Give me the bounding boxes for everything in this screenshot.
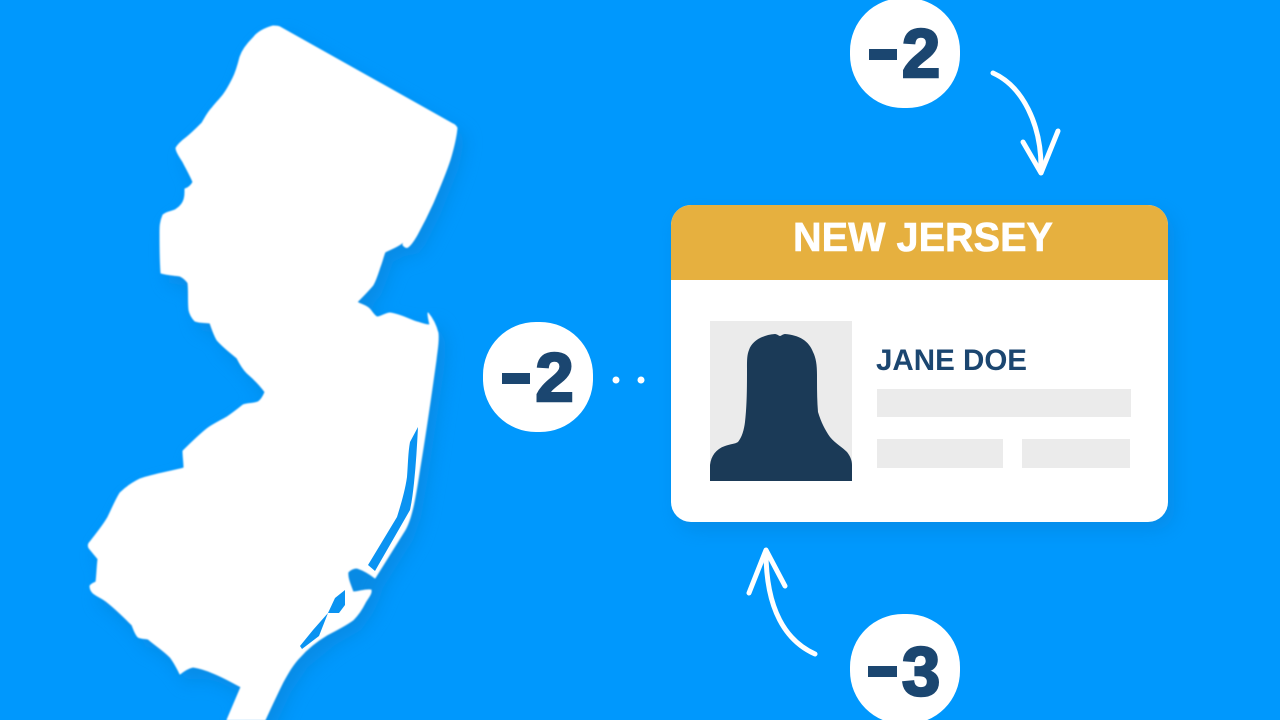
card heading: NEW JERSEY (793, 214, 1053, 260)
map: coastal lagoon upper (368, 427, 418, 571)
id card (671, 205, 1174, 530)
cardholder name: JANE DOE (876, 344, 1027, 377)
photo silhouette (710, 334, 852, 481)
placeholder line full (877, 389, 1131, 417)
badge: minus 3 bottom: 3 (902, 633, 940, 710)
badge: minus 3 bottom (850, 614, 960, 720)
map: New Jersey silhouette (88, 26, 465, 720)
badge: minus 2 middle (483, 322, 593, 432)
placeholder line left (877, 439, 1003, 468)
arrow: bottom badge to card (749, 550, 815, 654)
badge: minus 2 top (850, 0, 960, 108)
dotted connector (612, 376, 644, 384)
card header band (671, 205, 1168, 280)
badge: minus 2 middle: 2 (535, 339, 574, 416)
placeholder line right (1022, 439, 1130, 468)
badge: minus 2 top: 2 (902, 15, 940, 92)
arrow: top badge to card (993, 73, 1058, 173)
map: coastal lagoon lower (300, 590, 345, 649)
photo background (710, 321, 852, 481)
